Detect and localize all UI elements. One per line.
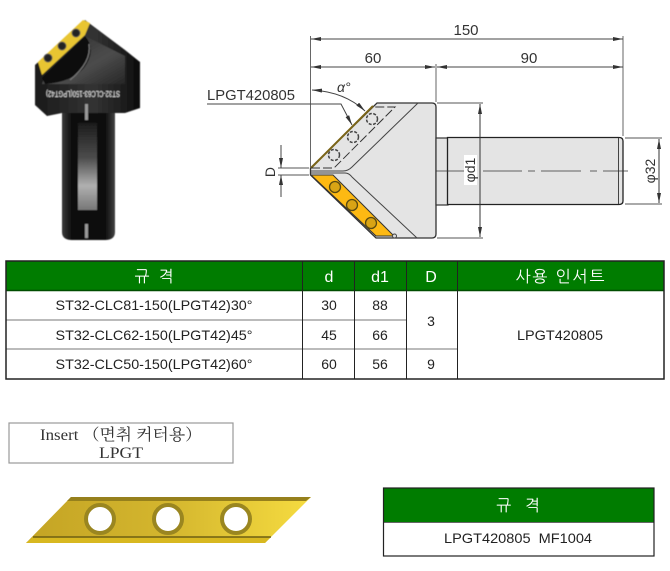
drawing: lower insert screws — [330, 182, 376, 228]
callout: LPGT420805 — [207, 87, 352, 125]
table: row 30 degrees: 88 — [372, 297, 388, 313]
insert: top chamfer — [67, 497, 311, 501]
insert: bottom chamfer — [26, 537, 271, 543]
dimension: D: D — [262, 167, 278, 177]
dimension: phi d1: φd1 — [462, 157, 478, 182]
table: row 45 degrees: ST32-CLC62-150(LPGT42)45° — [56, 327, 252, 343]
drawing: center line — [436, 170, 628, 172]
drawing: lower yellow insert — [311, 175, 394, 236]
spec: header band — [383, 488, 654, 522]
insert: body — [26, 497, 311, 543]
insert illustration — [26, 497, 311, 543]
dimension: 90: 90 — [521, 50, 537, 67]
photo: insert pocket — [42, 36, 91, 84]
table: row 60 degrees: 9 — [427, 356, 435, 372]
insert: bottom edge line — [33, 536, 271, 538]
drawing: neck — [436, 138, 448, 205]
dimension: 60 — [311, 50, 435, 67]
spec table — [6, 261, 664, 379]
table: grid lines — [6, 261, 664, 379]
insert title text: Insert （면취 커터용） — [40, 425, 202, 444]
technical drawing — [207, 22, 662, 238]
table: row 45 degrees: 45 — [321, 327, 337, 343]
spec: header label: 규 격 — [496, 498, 540, 514]
table: row 60 degrees: 56 — [372, 356, 388, 372]
table: row 45 degrees: 66 — [372, 327, 388, 343]
table: row 45 degrees — [56, 327, 388, 343]
dimension: 60: 60 — [365, 50, 381, 67]
dimension: phi 32 — [642, 139, 659, 203]
table: merged D value: 3 — [427, 313, 435, 329]
drawing: hidden screw circles — [328, 114, 378, 160]
spec: borders — [383, 488, 654, 556]
photo: cone face — [42, 36, 125, 84]
photo: insert screws — [44, 29, 80, 62]
table: header labels: 규 격 — [134, 269, 174, 285]
insert title text: LPGT — [99, 445, 143, 462]
insert: holes — [86, 505, 250, 533]
callout: LPGT420805: LPGT420805 — [207, 87, 295, 104]
photo: shank — [62, 105, 115, 240]
table: row 60 degrees: 60 — [321, 356, 337, 372]
spec: value: LPGT420805 MF1004 — [444, 530, 592, 546]
drawing: hidden insert outline — [311, 107, 395, 168]
table: header labels: d — [325, 269, 333, 286]
photo: pocket highlight — [70, 44, 89, 80]
table: row 30 degrees: 30 — [321, 297, 337, 313]
photo: engraved label: ST32-CLC63-150(LPGT42) — [46, 89, 120, 98]
dimension: extension lines — [278, 36, 662, 238]
photo: yellow insert — [38, 20, 90, 75]
photo: shank pin marks — [85, 104, 88, 238]
drawing: shank — [448, 138, 623, 204]
dimension: phi 32: φ32 — [642, 158, 658, 183]
drawing: shank chamfer line — [618, 138, 620, 204]
drawing: corner pin — [392, 234, 396, 238]
table: merged insert value: LPGT420805 — [517, 327, 603, 343]
table: header labels: d1 — [371, 269, 389, 286]
table: header labels — [134, 268, 604, 286]
table: row 60 degrees: ST32-CLC50-150(LPGT42)60° — [56, 356, 252, 372]
table: row 30 degrees: ST32-CLC81-150(LPGT42)30° — [56, 297, 252, 313]
insert title box — [9, 423, 233, 463]
table: row 60 degrees — [56, 356, 435, 372]
table: header labels: D — [425, 269, 437, 286]
photo: cutter head — [35, 20, 140, 116]
table: header band — [6, 261, 664, 290]
table: row 30 degrees — [56, 297, 388, 313]
table: header labels: 사용 인서트 — [516, 268, 604, 285]
dimension: 150: 150 — [453, 22, 479, 39]
photo: shank flat — [78, 123, 97, 210]
insert spec table — [383, 488, 654, 556]
insert title text — [40, 425, 202, 462]
dimension: angle — [312, 79, 365, 111]
drawing: cutter body — [310, 103, 436, 238]
photo: cutter tool — [35, 20, 140, 240]
drawing: body inner edges — [311, 103, 418, 238]
dimension: D — [262, 145, 281, 197]
dimension: phi d1 — [462, 104, 480, 237]
drawing: upper insert edge — [311, 106, 373, 168]
dimension: angle: α° — [337, 79, 351, 95]
